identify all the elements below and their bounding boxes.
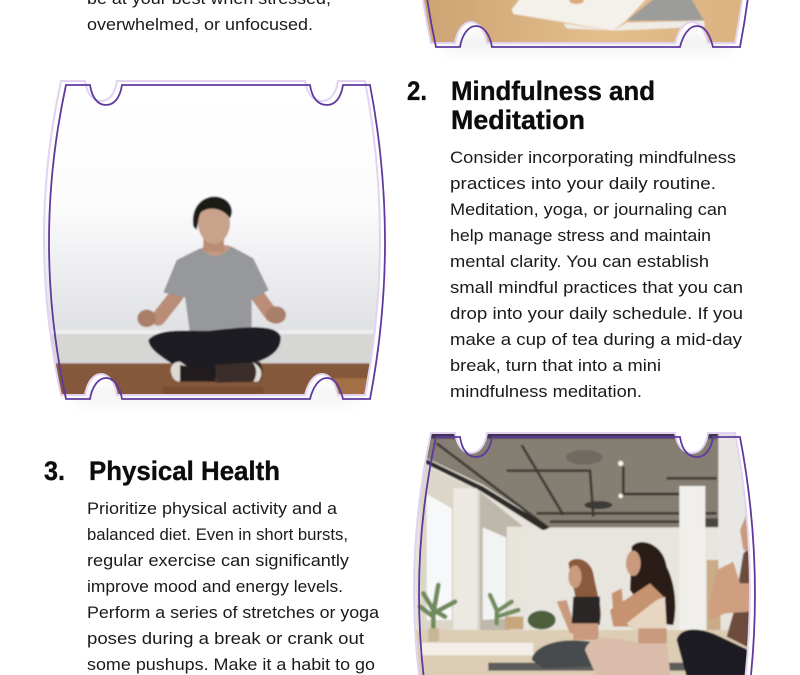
- panel: desk photo with frame: [422, 0, 748, 50]
- text block: item 1 ending: [87, 0, 331, 34]
- text block: physical health description: regular exercise can significantly: [87, 551, 350, 570]
- heading: 2. Mindfulness and Meditation: Mindfulness and: [451, 76, 655, 106]
- text block: physical health description: [87, 499, 380, 674]
- heading: 2. Mindfulness and Meditation: 2.: [407, 76, 427, 106]
- text block: mindfulness description: mindfulness meditation.: [450, 382, 642, 401]
- photo: yoga class: [415, 434, 749, 675]
- text block: physical health description: Prioritize physical activity and a: [87, 499, 338, 518]
- heading: 2. Mindfulness and Meditation: Meditation: [451, 105, 585, 135]
- studio: floor: [416, 629, 747, 675]
- man: shoes: [171, 362, 190, 382]
- text block: mindfulness description: Consider incorporating mindfulness: [450, 148, 736, 167]
- text block: mindfulness description: break, turn that into a mini: [450, 356, 661, 375]
- text block: physical health description: poses during a break or crank out: [87, 629, 364, 648]
- text block: mindfulness description: help manage stress and maintain: [450, 226, 711, 245]
- frame: light outline: [414, 433, 750, 675]
- text block: item 1 ending: overwhelmed, or unfocused.: [87, 15, 313, 34]
- man: shirt: [163, 247, 269, 333]
- man: head: [202, 238, 225, 252]
- panel: meditating man photo with frame: [43, 80, 386, 400]
- heading: 2. Mindfulness and Meditation: [407, 76, 655, 135]
- photo: man meditating: [45, 196, 379, 394]
- man: arms: [158, 295, 177, 318]
- text block: mindfulness description: make a cup of tea during a mid-day: [450, 330, 743, 349]
- text block: physical health description: balanced diet. Even in short bursts,: [87, 525, 348, 544]
- text block: physical health description: improve mood and energy levels.: [87, 577, 343, 596]
- frame: purple outline: [49, 85, 385, 399]
- photo: desk with books: [424, 0, 742, 42]
- heading: 3. Physical Health: 3.: [44, 456, 65, 486]
- text block: mindfulness description: practices into your daily routine.: [450, 174, 716, 193]
- heading: 3. Physical Health: Physical Health: [89, 456, 280, 486]
- text block: mindfulness description: small mindful practices that you can: [450, 278, 743, 297]
- frame: light outline: [423, 0, 742, 43]
- woman: second: [630, 542, 675, 625]
- text block: mindfulness description: Meditation, yoga, or journaling can: [450, 200, 727, 219]
- text block: mindfulness description: drop into your daily schedule. If you: [450, 304, 743, 323]
- text block: mindfulness description: mental clarity. You can establish: [450, 252, 709, 271]
- studio: ceiling: [427, 438, 720, 528]
- frame: light outline: [44, 81, 380, 395]
- woman: first: [568, 559, 601, 622]
- frame: purple outline: [419, 437, 755, 675]
- text block: mindfulness description: [450, 148, 743, 401]
- text block: physical health description: Perform a series of stretches or yoga: [87, 603, 380, 622]
- text block: physical health description: some pushups. Make it a habit to go: [87, 655, 375, 674]
- man: legs: [148, 327, 281, 378]
- panel: yoga class photo with frame: [413, 432, 756, 675]
- studio: plants: [420, 585, 455, 628]
- woman: third: [677, 630, 748, 675]
- frame: purple outline: [427, 0, 748, 47]
- studio: back wall and columns: [542, 528, 545, 532]
